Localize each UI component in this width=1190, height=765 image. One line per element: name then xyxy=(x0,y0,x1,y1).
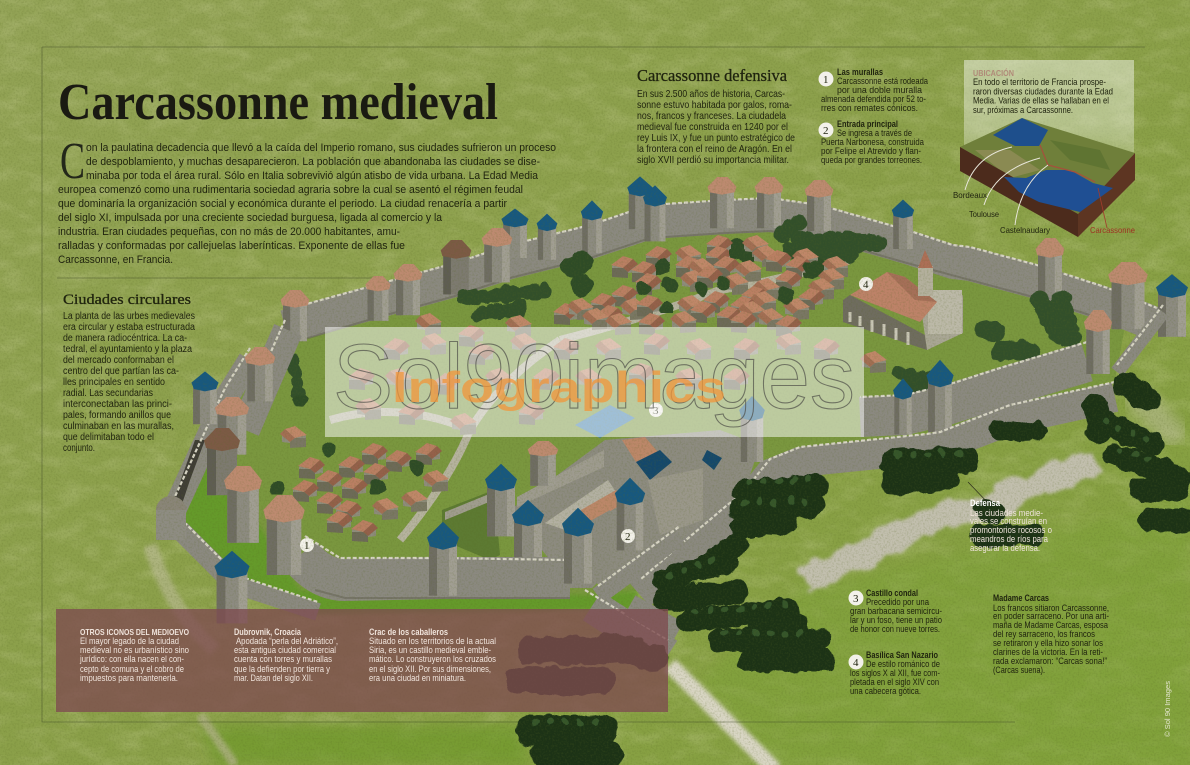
intro text block xyxy=(58,133,556,266)
text block: Madame Carcas: rada exclamaron: “Carcas sona!” xyxy=(993,656,1107,666)
panel: Carcassonne defensiva: siglo XVII perdió su importancia militar. xyxy=(637,154,789,166)
panel: Ciudades circulares: culminaban en las murallas, xyxy=(63,421,174,432)
panel: Carcassonne defensiva: medieval fue construida en 1240 por el xyxy=(637,121,788,133)
callout: Defensa: promontorios rocosos o xyxy=(970,525,1052,535)
map labels: Bordeaux xyxy=(953,190,988,200)
callout 4: Basílica San Nazario: una cabecera gótica. xyxy=(850,686,921,696)
column 2: Apodada “perla del Adriático”, xyxy=(236,636,338,646)
text block: Madame Carcas xyxy=(993,593,1109,675)
panel: Ciudades circulares: conjunto. xyxy=(63,443,95,454)
column 3 xyxy=(369,627,496,683)
callout 3: Castillo condal: 3 xyxy=(853,593,859,605)
callout: Defensa: vales se construían en xyxy=(970,516,1047,526)
text block: Madame Carcas: maña de Madame Carcas, esposa xyxy=(993,620,1108,630)
callout 1: Las murallas: por una doble muralla xyxy=(837,85,922,95)
north wall xyxy=(285,198,1157,342)
text block: Madame Carcas: (Carcas suena). xyxy=(993,665,1045,675)
intro text block: del siglo XI, impulsada por una creciente sociedad burguesa, ligada al comercio y la xyxy=(58,212,443,224)
callout numbers on the map: 2 xyxy=(625,531,630,543)
callout 2: Entrada principal: Se ingresa a través de xyxy=(837,128,912,138)
column 2: mar. Datan del siglo XII. xyxy=(234,673,313,683)
callout numbers on the map xyxy=(300,277,873,552)
column 1: cepto de comuna y el cobro de xyxy=(80,664,184,674)
column 1: El mayor legado de la ciudad xyxy=(80,636,179,646)
column 2: que la defienden por tierra y xyxy=(234,664,330,674)
west towers xyxy=(156,347,275,543)
watermark panel: Sol90images xyxy=(333,326,855,428)
castle towers xyxy=(485,464,645,569)
panel: Carcassonne defensiva xyxy=(637,66,795,166)
south wall xyxy=(300,510,610,598)
interior trees among houses xyxy=(582,252,813,310)
callout 2: Entrada principal: Puerta Narbonesa, construida xyxy=(821,137,924,147)
callout 3: Castillo condal: Castillo condal xyxy=(866,588,918,598)
callout numbers on the map: 4 xyxy=(863,279,869,291)
panel: Carcassonne defensiva: En sus 2.500 años de historia, Carcas- xyxy=(637,88,785,100)
callout: Defensa xyxy=(970,498,1052,553)
callout 4: Basílica San Nazario: pletada en el siglo XIV con xyxy=(850,677,939,687)
panel: Ciudades circulares: tedral, el ayuntamiento y la plaza xyxy=(63,344,192,355)
garden trees south-west xyxy=(277,400,417,490)
panel: Ubicación: raron diversas ciudades durante la Edad xyxy=(973,86,1113,98)
houses: central quarter xyxy=(348,333,840,435)
callout 4: Basílica San Nazario xyxy=(848,650,940,696)
panel: Ciudades circulares: que delimitaban todo el xyxy=(63,432,154,443)
callout: Defensa: asegurar la defensa. xyxy=(970,543,1040,553)
outer east wall xyxy=(640,382,1115,595)
text block: Madame Carcas: del rey sarraceno, los francos xyxy=(993,629,1095,639)
callout 1: Las murallas: almenada defendida por 52 to- xyxy=(821,94,926,104)
text block: Madame Carcas: en poder sarraceno. Por una arti- xyxy=(993,611,1109,621)
panel: Ubicación xyxy=(953,60,1135,237)
panel: Ubicación: Toulouse xyxy=(969,209,999,219)
cathedral: Basilica San Nazario xyxy=(843,250,963,350)
panel: Ubicación: En todo el territorio de Francia prospe- xyxy=(973,77,1106,88)
illustration: walled city of Carcassonne xyxy=(156,176,1188,755)
count's castle: Castillo condal xyxy=(442,396,765,585)
intro text block: on la paulatina decadencia que llevó a la caída del Imperio romano, sus ciudades sufrieron un proceso xyxy=(86,142,556,154)
panel: Ubicación: Castelnaudary xyxy=(1000,225,1051,235)
callout 4: Basílica San Nazario: De estilo románico de xyxy=(866,659,940,669)
callout 2: Entrada principal: queda por grandes torreones. xyxy=(821,155,922,165)
panel: Ciudades circulares: interconectaban las princi- xyxy=(63,399,172,410)
callout 2: Entrada principal xyxy=(818,119,924,165)
column 2: cuenta con torres y murallas xyxy=(234,654,332,664)
column 3: Siria, es un castillo medieval emble- xyxy=(369,645,491,655)
heading: UBICACIÓN xyxy=(973,67,1014,78)
callout 3: Castillo condal xyxy=(848,588,942,634)
column 3: Situado en los territorios de la actual xyxy=(369,636,496,646)
callout 3: Castillo condal: Precedido por una xyxy=(866,597,929,607)
panel: Carcassonne defensiva: la frontera con el reino de Aragón. En el xyxy=(637,143,792,155)
callout 1: Las murallas: Carcassonne está rodeada xyxy=(837,76,928,86)
watermark panel: Infographics xyxy=(392,363,726,412)
column 1 xyxy=(79,627,189,683)
north wall towers xyxy=(281,176,1188,341)
text block: Madame Carcas: Los francos sitiaron Carcassonne, xyxy=(993,603,1109,613)
panel: Ciudades circulares: del mercado conformaban el xyxy=(63,355,174,366)
title: Carcassonne medieval xyxy=(58,74,498,131)
callout 1: Las murallas xyxy=(818,67,928,113)
column 2: esta antigua ciudad comercial xyxy=(234,645,336,655)
column 2: Dubrovnik, Croacia xyxy=(234,627,302,637)
houses: south-western quarter xyxy=(280,426,449,542)
south towers xyxy=(214,495,594,623)
callout 4: Basílica San Nazario: los siglos X al XII, fue com- xyxy=(850,668,940,678)
text block: Madame Carcas: clarines de la victoria. En la reti- xyxy=(993,647,1103,657)
intro text block: Carcassonne, en Francia. xyxy=(58,254,173,266)
column 1: OTROS ICONOS DEL MEDIOEVO xyxy=(80,627,189,637)
dark forest xyxy=(520,385,1188,755)
panel: Ciudades circulares xyxy=(63,292,195,454)
column 1: jurídico: con ella nacen el con- xyxy=(79,654,184,664)
inner east wall xyxy=(860,305,1163,417)
intro text block: industria. Eran ciudades pequeñas, con no más de 20.000 habitantes, amu- xyxy=(58,226,400,238)
column 3: en el siglo XII. Por sus dimensiones, xyxy=(369,664,491,674)
panel: Ciudades circulares: radial. Las secundarias xyxy=(63,388,153,399)
callout numbers on the map: 1 xyxy=(304,540,310,552)
panel: Ciudades circulares: lles principales en sentido xyxy=(63,377,165,388)
intro text block: de despoblamiento, y muchas desaparecieron. La población que abandonaba las ciudades se dise- xyxy=(86,156,540,168)
callout 1: Las murallas: Las murallas xyxy=(837,67,883,77)
text block: Madame Carcas: se retiraron y ella hizo sonar los xyxy=(993,638,1103,648)
heading: Carcassonne defensiva xyxy=(637,66,788,85)
column 2 xyxy=(234,627,338,683)
callout 4: Basílica San Nazario: Basílica San Nazario xyxy=(866,650,938,660)
callout numbers on the map: 3 xyxy=(653,405,659,417)
callout: Defensa: meandros de ríos para xyxy=(970,534,1048,544)
callout 4: Basílica San Nazario: 4 xyxy=(853,657,859,669)
interior trees behind houses xyxy=(293,222,1072,400)
panel: Ciudades circulares: era circular y estaba estructurada xyxy=(63,322,195,333)
heading: Ciudades circulares xyxy=(63,292,191,308)
terrain block map xyxy=(960,118,1135,237)
drop cap: C xyxy=(60,133,85,190)
intro text block: ralladas y conformadas por callejuelas laberínticas. Exponente de ellas fue xyxy=(58,240,405,252)
gate walls xyxy=(585,526,680,655)
column 3: Crac de los caballeros xyxy=(369,627,448,637)
callout 2: Entrada principal: por Felipe el Atrevido y flan- xyxy=(821,146,921,156)
panel: Carcassonne defensiva: nos, francos y franceses. La ciudadela xyxy=(637,110,786,122)
panel: Ciudades circulares: La planta de las urbes medievales xyxy=(63,311,195,322)
callout: Defensa: Defensa xyxy=(970,498,1001,508)
callout 1: Las murallas: 1 xyxy=(823,74,828,86)
callout 2: Entrada principal: Entrada principal xyxy=(837,119,898,129)
panel: Ciudades circulares: de manera radiocéntrica. La ca- xyxy=(63,333,187,344)
panel: Carcassonne defensiva: sonne estuvo habitada por galos, roma- xyxy=(637,99,792,111)
intro text block: minaba por toda el área rural. Sólo en Italia sobrevivió algún atisbo de vida urbana. La Edad Media xyxy=(86,170,539,182)
callout 3: Castillo condal: lar y un foso, tiene un patio xyxy=(850,615,942,625)
city ground xyxy=(165,215,1130,615)
column 3: era una ciudad en miniatura. xyxy=(369,673,466,683)
panel: otros iconos del medievo xyxy=(56,609,668,712)
panel: Ubicación: Media. Varias de ellas se hallaban en el xyxy=(973,96,1109,106)
panel: Carcassonne defensiva: rey Luis IX, y fue un punto estratégico de xyxy=(637,132,795,144)
panel: Ciudades circulares: pales, formando anillos que xyxy=(63,410,171,421)
callout 1: Las murallas: rres con remates cónicos. xyxy=(821,103,918,113)
column 1: impuestos para mantenerla. xyxy=(80,673,178,683)
panel: Ubicación: sur, próximas a Carcassonne. xyxy=(973,105,1073,116)
column 1: medieval no es urbanístico sino xyxy=(80,645,189,655)
column 3: mático. Lo construyeron los cruzados xyxy=(369,654,496,664)
east towers xyxy=(893,310,1112,434)
panel: Ubicación: Carcassonne xyxy=(1090,225,1135,235)
houses: northern quarter xyxy=(415,235,887,373)
text block: Madame Carcas: Madame Carcas xyxy=(993,593,1049,603)
callout 2: Entrada principal: 2 xyxy=(823,125,828,137)
callout 3: Castillo condal: gran barbacana semicircu- xyxy=(850,606,942,616)
west walls xyxy=(172,320,318,612)
intro text block: que dominaría la organización social y económica durante el periodo. La ciudad renacería a partir xyxy=(58,198,507,210)
credit: © Sol 90 Images xyxy=(1164,680,1172,737)
intro text block: europea comenzó como una rudimentaria sociedad agraria sobre la cual se asentó el régimen feudal xyxy=(58,184,523,196)
callout 3: Castillo condal: de honor con nueve torres. xyxy=(850,624,940,634)
callout: Defensa: Las ciudades medie- xyxy=(970,508,1043,518)
panel: Ciudades circulares: centro del que partían las ca- xyxy=(63,366,179,377)
